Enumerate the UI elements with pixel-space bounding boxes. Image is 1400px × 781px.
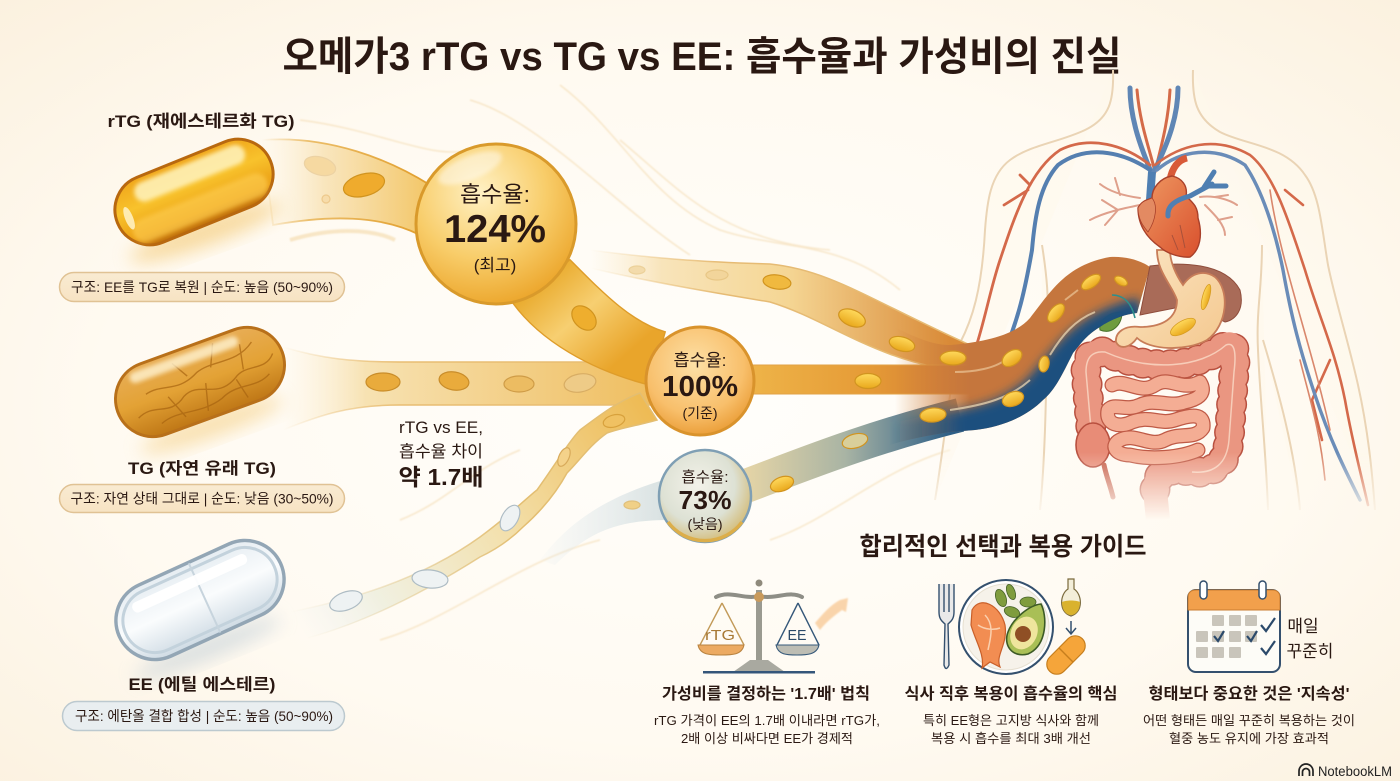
calendar label [1287, 617, 1333, 661]
tube: rTG lower section [513, 260, 665, 385]
gallbladder [1100, 312, 1122, 331]
guide item: take with meals [904, 579, 1118, 746]
stomach capsules [1170, 284, 1212, 336]
blood vessels [975, 88, 1368, 505]
description: 혈중 농도 유지에 가장 효과적 [1169, 731, 1329, 746]
guide heading: 합리적인 선택과 복용 가이드 [860, 533, 1146, 561]
icon: fork, plate and capsule [939, 579, 1089, 678]
capsule: rTG [104, 129, 285, 273]
title: 오메가3 rTG vs TG vs EE: 흡수율과 가성비의 진실 [282, 35, 1122, 79]
tube: pale blue EE branch [540, 478, 670, 565]
callout: rTG vs EE difference: 약 1.7배 [398, 464, 484, 490]
pill: TG structure and purity: 구조: 자연 상태 그대로 | 순도: 낮음 (30~50%) [70, 490, 334, 506]
guide item: price rule [654, 580, 880, 746]
badge: TG 100%: 100% [662, 371, 738, 403]
callout: rTG vs EE difference: rTG vs EE, [399, 419, 483, 437]
badge: TG 100% [646, 327, 754, 435]
description: 특히 EE형은 고지방 식사와 함께 [923, 713, 1099, 728]
bile duct [1112, 295, 1135, 318]
icon: balance scale: EE [788, 627, 806, 644]
tube: gold stream to body [740, 365, 980, 394]
badge: EE 73%: 흡수율: [682, 469, 728, 486]
callout: rTG vs EE difference [398, 419, 484, 490]
guide item: consistency [1143, 581, 1355, 746]
colon [1076, 344, 1235, 520]
badge: EE 73%: 73% [678, 485, 732, 515]
pill: EE structure and purity [62, 702, 344, 730]
spleen and liver [1140, 264, 1241, 322]
tube: EE stream [290, 393, 657, 640]
pill: EE structure and purity: 구조: 에탄올 결합 합성 | 순도: 높음 (50~90%) [75, 708, 333, 724]
label: TG: TG (자연 유래 TG) [128, 459, 276, 478]
tube: rTG stream [262, 139, 665, 385]
heading: 식사 직후 복용이 흡수율의 핵심 [904, 684, 1118, 703]
tube: TG stream [283, 347, 660, 430]
tube: merged stream in gut [890, 257, 1150, 445]
label: rTG: rTG (재에스테르화 TG) [108, 112, 294, 131]
description: 2배 이상 비싸다면 EE가 경제적 [681, 731, 853, 746]
badge: EE 73% [659, 450, 751, 542]
capsule: EE [103, 528, 297, 687]
blue lower flow band [895, 289, 1142, 443]
badge: EE 73%: (낮음) [687, 516, 723, 532]
icon: balance scale [698, 580, 848, 674]
internal organs [1076, 158, 1241, 520]
absorption flow tubes [262, 139, 1150, 640]
heart [1138, 158, 1226, 257]
badge: TG 100%: 흡수율: [674, 351, 726, 370]
capsules moving through tubes [302, 153, 1129, 615]
callout: rTG vs EE difference: 흡수율 차이 [399, 442, 483, 461]
pill: TG structure and purity [60, 484, 344, 512]
description: 복용 시 흡수를 최대 3배 개선 [931, 731, 1091, 746]
description: 어떤 형태든 매일 꾸준히 복용하는 것이 [1143, 713, 1355, 728]
capsule: TG [105, 317, 295, 462]
small intestine [1108, 382, 1203, 458]
heading: 형태보다 중요한 것은 '지속성' [1148, 685, 1350, 703]
badge: rTG 124%: 흡수율: [460, 182, 530, 207]
badge: rTG 124%: 124% [444, 208, 546, 251]
body outline [935, 70, 1375, 510]
icon: balance scale: rTG [705, 627, 735, 644]
description [654, 713, 880, 746]
description: rTG 가격이 EE의 1.7배 이내라면 rTG가, [654, 713, 880, 728]
badge: rTG 124%: (최고) [474, 256, 516, 275]
label: EE: EE (에틸 에스테르) [128, 675, 276, 694]
pill: rTG structure and purity: 구조: EE를 TG로 복원 | 순도: 높음 (50~90%) [71, 279, 333, 295]
icon: calendar [1188, 581, 1280, 672]
tube: low stream to body [735, 415, 960, 490]
pill: rTG structure and purity [60, 272, 344, 302]
logo: NotebookLM: NotebookLM [1318, 764, 1392, 779]
description [1143, 713, 1355, 746]
calendar label: 꾸준히 [1287, 642, 1333, 661]
calendar label: 매일 [1287, 617, 1319, 636]
badge: TG 100%: (기준) [682, 405, 718, 421]
badge: rTG 124% [416, 144, 576, 304]
description [923, 713, 1099, 746]
heading: 가성비를 결정하는 '1.7배' 법칙 [662, 685, 870, 703]
decorative flow wisps [290, 85, 950, 640]
stomach [1116, 250, 1225, 348]
tube: pale upper stream [590, 250, 970, 372]
body silhouette and blood vessels [935, 70, 1375, 510]
